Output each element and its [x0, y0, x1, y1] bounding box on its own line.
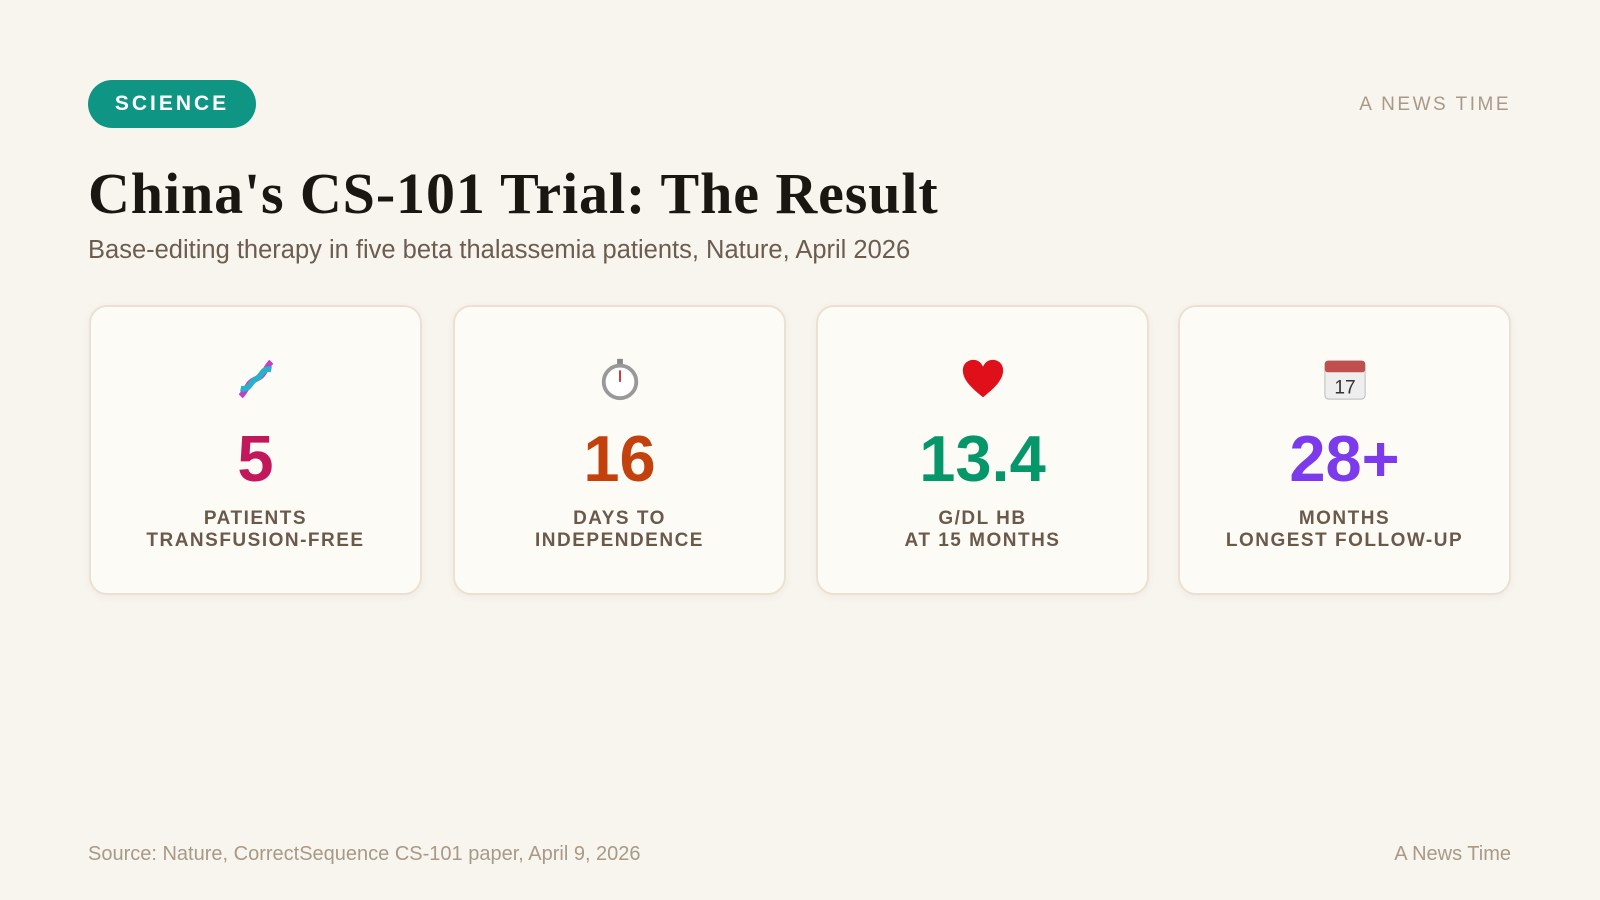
value: 13.4 — [919, 422, 1046, 495]
card: patients — [89, 305, 422, 595]
card: hb — [816, 305, 1149, 595]
label: INDEPENDENCE — [535, 530, 704, 551]
title: China's CS-101 Trial: The Result — [88, 161, 939, 226]
value: 5 — [237, 422, 274, 495]
label: DAYS TO — [573, 508, 666, 529]
subtitle: Base-editing therapy in five beta thalassemia patients, Nature, April 2026 — [88, 236, 910, 264]
label — [146, 508, 365, 551]
brand header: A NEWS TIME — [1359, 94, 1511, 115]
label: LONGEST FOLLOW-UP — [1226, 530, 1463, 551]
card: days — [453, 305, 786, 595]
tag: science: SCIENCE — [115, 92, 229, 115]
icon: stopwatch — [602, 358, 638, 400]
footer: source: Source: Nature, CorrectSequence CS-101 paper, April 9, 2026 — [88, 843, 641, 865]
icon: heart — [962, 360, 1004, 398]
icon: calendar: 17 — [1334, 377, 1355, 398]
label — [905, 508, 1060, 551]
label: TRANSFUSION-FREE — [146, 530, 365, 551]
icon: dna — [238, 360, 274, 398]
card: months — [1178, 305, 1511, 595]
label: MONTHS — [1299, 508, 1390, 529]
tag: science — [88, 80, 256, 128]
label — [535, 508, 704, 551]
footer: brand: A News Time — [1394, 843, 1511, 865]
value: 28+ — [1289, 422, 1400, 495]
label: PATIENTS — [204, 508, 307, 529]
icon: calendar — [1324, 360, 1366, 400]
value: 16 — [583, 422, 656, 495]
label: AT 15 MONTHS — [905, 530, 1060, 551]
label — [1226, 508, 1463, 551]
label: G/DL HB — [938, 508, 1027, 529]
